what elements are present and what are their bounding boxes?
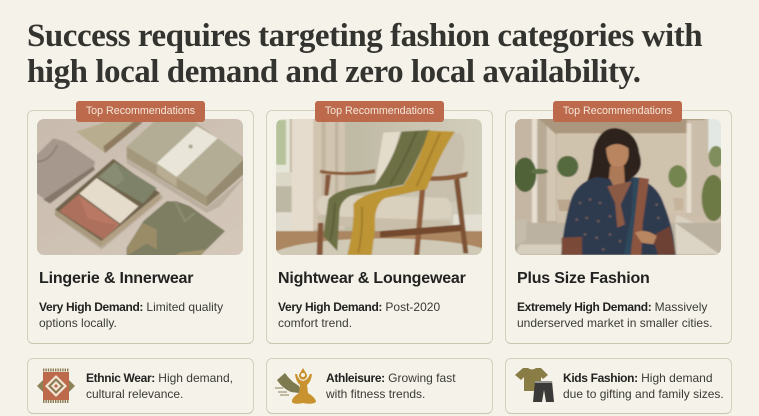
badge: top recommendations: Top Recommendations (86, 105, 195, 117)
badge: top recommendations: Top Recommendations (325, 105, 434, 117)
title (27, 18, 702, 90)
text: nightwear demand: Very High Demand: Post-2020 (278, 300, 440, 314)
text: nightwear demand (278, 300, 440, 330)
text: athleisure: Athleisure: Growing fast (326, 371, 456, 385)
text: kids fashion: Kids Fashion: High demand (563, 371, 713, 385)
text: plus size demand: underserved market in smaller cities. (517, 316, 712, 330)
text: ethnic wear (86, 371, 233, 401)
text: ethnic wear: cultural relevance. (86, 387, 183, 401)
title: Success requires targeting fashion categories with (27, 18, 702, 54)
panel: ethnic wear (27, 358, 254, 414)
text: kids fashion: due to gifting and family sizes. (563, 387, 724, 401)
text: lingerie demand (39, 300, 224, 330)
badge: top recommendations (553, 101, 682, 122)
heading: plus size fashion: Plus Size Fashion (517, 270, 650, 287)
text: nightwear demand: comfort trend. (278, 316, 352, 330)
panel: nightwear and loungewear (266, 110, 493, 344)
title: high local demand and zero local availability. (27, 54, 641, 90)
heading: nightwear and loungewear: Nightwear & Loungewear (278, 270, 466, 287)
text: lingerie demand: Very High Demand: Limited quality (39, 300, 223, 314)
text: athleisure (326, 371, 456, 401)
heading: lingerie and innerwear: Lingerie & Innerwear (39, 270, 193, 287)
icon: ethnic rug (37, 368, 75, 403)
photo: armchair with draped throws (276, 119, 482, 255)
icon: t-shirt and shorts (515, 368, 554, 402)
icon: sneaker and yoga figure (275, 368, 316, 404)
text: plus size demand: Extremely High Demand: Massively (517, 300, 707, 314)
text: athleisure: with fitness trends. (326, 387, 425, 401)
text: ethnic wear: Ethnic Wear: High demand, (86, 371, 233, 385)
photo: folded garments in boxes (37, 119, 243, 255)
badge: top recommendations: Top Recommendations (563, 105, 672, 117)
text: lingerie demand: options locally. (39, 316, 117, 330)
photo: woman in kurta in a courtyard (515, 119, 721, 255)
text: plus size demand (517, 300, 712, 330)
panel: athleisure (266, 358, 493, 414)
panel: kids fashion (505, 358, 732, 414)
panel: plus size fashion (505, 110, 732, 344)
badge: top recommendations (76, 101, 205, 122)
panel: lingerie and innerwear (27, 110, 254, 344)
badge: top recommendations (315, 101, 444, 122)
text: kids fashion (563, 371, 724, 401)
